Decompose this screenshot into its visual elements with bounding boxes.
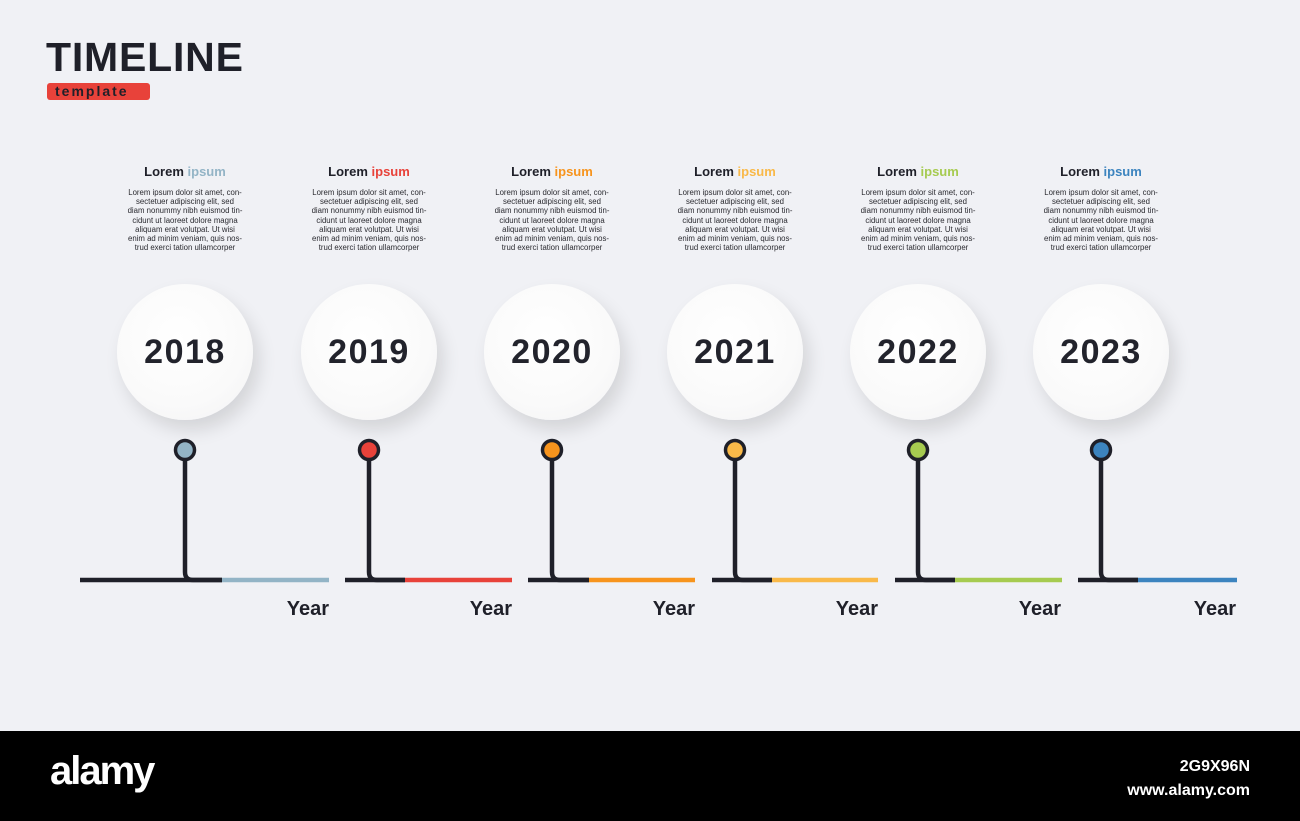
text: cidunt ut laoreet dolore magna [865, 216, 971, 225]
text: aliquam erat volutpat. Ut wisi [685, 225, 785, 234]
text: enim ad minim veniam, quis nos- [128, 234, 242, 243]
pin 2021 [712, 440, 878, 580]
year label: Year [1019, 598, 1061, 620]
pin 2019 [345, 440, 512, 580]
circle [484, 284, 620, 420]
text: Lorem ipsum dolor sit amet, con- [1044, 188, 1158, 197]
year label: Year [653, 598, 695, 620]
text: diam nonummy nibh euismod tin- [128, 206, 242, 215]
circle [1033, 284, 1169, 420]
column 2020 [484, 164, 695, 620]
circle: 2023 [1060, 332, 1142, 370]
text: aliquam erat volutpat. Ut wisi [868, 225, 968, 234]
circle: 2020 [511, 332, 593, 370]
text [1044, 188, 1158, 252]
text: diam nonummy nibh euismod tin- [312, 206, 426, 215]
circle [667, 284, 803, 420]
circle: 2022 [877, 332, 959, 370]
text: enim ad minim veniam, quis nos- [1044, 234, 1158, 243]
text: enim ad minim veniam, quis nos- [495, 234, 609, 243]
column 2018 [117, 164, 329, 620]
pin 2023 [1078, 440, 1237, 580]
text [860, 188, 976, 252]
text: sectetuer adipiscing elit, sed [136, 197, 234, 206]
text: cidunt ut laoreet dolore magna [1048, 216, 1154, 225]
text: trud exerci tation ullamcorper [1051, 243, 1151, 252]
text: enim ad minim veniam, quis nos- [678, 234, 792, 243]
text: cidunt ut laoreet dolore magna [132, 216, 238, 225]
circle [850, 284, 986, 420]
text: diam nonummy nibh euismod tin- [861, 206, 975, 215]
text: trud exerci tation ullamcorper [685, 243, 785, 252]
text: aliquam erat volutpat. Ut wisi [1051, 225, 1151, 234]
text: Lorem ipsum dolor sit amet, con- [312, 188, 426, 197]
year label: Year [287, 598, 329, 620]
heading: Lorem ipsum [1060, 164, 1142, 179]
badge: template [47, 83, 150, 100]
footer id: www.alamy.com [1127, 782, 1250, 799]
year label: Year [836, 598, 878, 620]
heading: Lorem ipsum [694, 164, 776, 179]
badge: template: template [55, 83, 129, 99]
heading: Lorem ipsum [877, 164, 959, 179]
footer id [1127, 758, 1250, 799]
text [678, 188, 792, 252]
text: cidunt ut laoreet dolore magna [682, 216, 788, 225]
text: diam nonummy nibh euismod tin- [1044, 206, 1158, 215]
circle [117, 284, 253, 420]
circle: 2021 [694, 332, 776, 370]
text: sectetuer adipiscing elit, sed [869, 197, 967, 206]
circle: 2018 [144, 332, 226, 370]
title: TIMELINE [46, 34, 244, 80]
heading: Lorem ipsum [328, 164, 410, 179]
text [128, 188, 242, 252]
text: diam nonummy nibh euismod tin- [678, 206, 792, 215]
text [312, 188, 426, 252]
text: aliquam erat volutpat. Ut wisi [319, 225, 419, 234]
pin 2018 [80, 440, 329, 580]
text: trud exerci tation ullamcorper [868, 243, 968, 252]
pin 2020 [528, 440, 695, 580]
text: enim ad minim veniam, quis nos- [312, 234, 426, 243]
text: trud exerci tation ullamcorper [319, 243, 419, 252]
text: Lorem ipsum dolor sit amet, con- [678, 188, 792, 197]
text: sectetuer adipiscing elit, sed [686, 197, 784, 206]
text: trud exerci tation ullamcorper [502, 243, 602, 252]
footer logo: alamy [50, 749, 153, 793]
text: Lorem ipsum dolor sit amet, con- [128, 188, 242, 197]
text: sectetuer adipiscing elit, sed [1052, 197, 1150, 206]
text: trud exerci tation ullamcorper [135, 243, 235, 252]
text [494, 188, 610, 252]
text: sectetuer adipiscing elit, sed [320, 197, 418, 206]
text: sectetuer adipiscing elit, sed [503, 197, 601, 206]
pin 2022 [895, 440, 1062, 580]
text: aliquam erat volutpat. Ut wisi [502, 225, 602, 234]
text: diam nonummy nibh euismod tin- [495, 206, 609, 215]
footer bar [0, 731, 1300, 821]
text: enim ad minim veniam, quis nos- [861, 234, 975, 243]
text: Lorem ipsum dolor sit amet, con- [861, 188, 975, 197]
year label: Year [470, 598, 512, 620]
year label: Year [1194, 598, 1236, 620]
text: aliquam erat volutpat. Ut wisi [135, 225, 235, 234]
column 2021 [667, 164, 878, 620]
heading: Lorem ipsum [511, 164, 593, 179]
column 2019 [301, 164, 512, 620]
footer id: 2G9X96N [1180, 758, 1250, 775]
text: cidunt ut laoreet dolore magna [499, 216, 605, 225]
text: cidunt ut laoreet dolore magna [316, 216, 422, 225]
text: Lorem ipsum dolor sit amet, con- [495, 188, 609, 197]
column 2023 [1033, 164, 1236, 620]
column 2022 [850, 164, 1061, 620]
circle: 2019 [328, 332, 410, 370]
heading: Lorem ipsum [144, 164, 226, 179]
circle [301, 284, 437, 420]
